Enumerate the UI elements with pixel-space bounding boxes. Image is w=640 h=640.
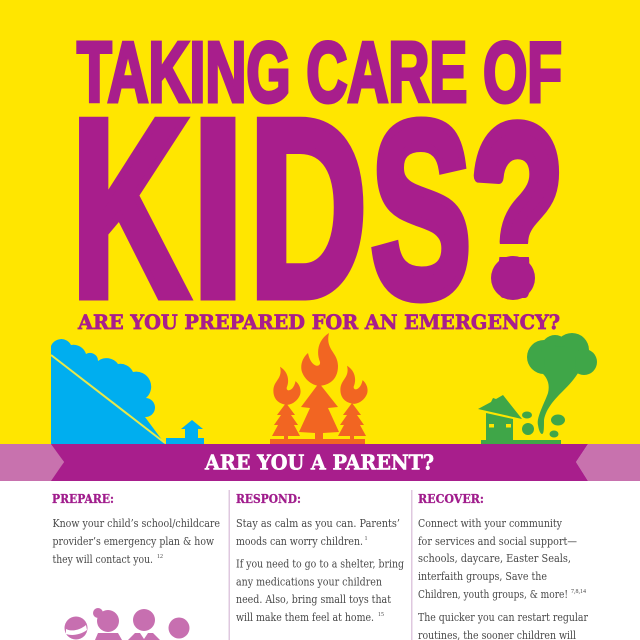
text: prepare body: provider’s emergency plan & how <box>52 535 214 548</box>
heading: respond: RESPOND: <box>236 491 301 506</box>
text: respond body: If you need to go to a shelter, bring <box>236 558 404 570</box>
text: recover body: The quicker you can restart regular <box>418 611 589 624</box>
icon: landslide <box>51 339 204 444</box>
title: kids: S <box>370 70 472 349</box>
panel: respond <box>236 491 404 624</box>
title: kids: ? <box>471 78 563 342</box>
text: recover body: interfaith groups, Save the <box>418 570 547 583</box>
icon: damaged house <box>478 395 561 444</box>
text: respond body: moods can worry children. <box>236 535 363 548</box>
text: recover body <box>418 517 589 640</box>
icon: wildfire <box>270 333 368 444</box>
icon: tornado <box>478 333 597 444</box>
text: respond body: need. Also, bring small toys that <box>236 593 391 606</box>
text: respond body: Stay as calm as you can. Parents’ <box>236 517 400 530</box>
text: respond body: will make them feel at home. <box>236 611 374 624</box>
heading: recover: RECOVER: <box>418 491 484 506</box>
text: recover body: Connect with your community <box>418 517 563 530</box>
title: kids <box>71 66 563 350</box>
text: respond body <box>236 517 404 624</box>
text: respond body: any medications your children <box>236 576 382 588</box>
text: recover body: Children, youth groups, & more! <box>418 588 568 601</box>
text: recover body: schools, daycare, Easter Seals, <box>418 552 571 565</box>
title: kids: I <box>191 66 245 350</box>
subtitle: ARE YOU PREPARED FOR AN EMERGENCY? <box>77 310 560 334</box>
banner <box>0 444 640 481</box>
icon: family group <box>64 608 190 640</box>
text: prepare body: Know your child’s school/childcare <box>52 517 220 530</box>
text: respond body: 15 <box>378 612 384 618</box>
title: kids: K <box>71 66 189 350</box>
text: recover body: 7,8,14 <box>571 589 586 595</box>
text: prepare body: 12 <box>157 554 163 560</box>
text: recover body: for services and social support— <box>418 535 577 548</box>
heading: prepare: PREPARE: <box>52 491 114 506</box>
text: prepare body: they will contact you. <box>52 553 153 566</box>
text: respond body: 1 <box>364 536 368 542</box>
panel: prepare <box>52 491 220 640</box>
banner heading: ARE YOU A PARENT? <box>204 450 434 474</box>
text: prepare body <box>52 517 220 566</box>
panel: recover <box>418 491 589 640</box>
title: kids: D <box>249 66 367 350</box>
icon: house in landslide path <box>166 420 204 444</box>
